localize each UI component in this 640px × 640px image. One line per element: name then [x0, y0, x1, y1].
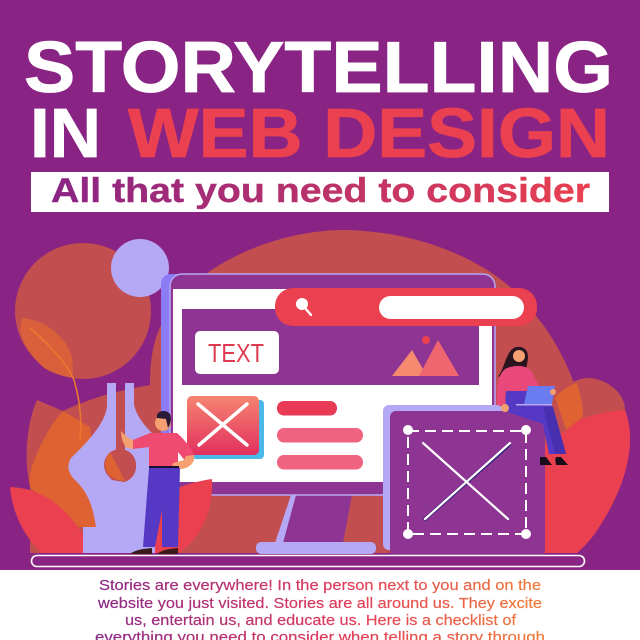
text button: TEXT: [208, 338, 264, 368]
platform: [32, 556, 584, 566]
title: [24, 28, 613, 172]
title: IN: [30, 94, 101, 172]
icon: magnifier: [296, 298, 311, 315]
legs: [505, 391, 566, 454]
search bar: [275, 288, 537, 326]
title: STORYTELLING: [24, 28, 613, 108]
icon: mountains: [392, 336, 459, 376]
monitor: [161, 274, 495, 554]
intro panel: website you just visited. Stories are all around us. They excite: [97, 595, 542, 612]
heels: [540, 458, 568, 465]
monitor stand: [278, 495, 352, 543]
intro panel: Stories are everywhere! In the person next to you and on the: [99, 577, 541, 594]
trousers: [143, 468, 180, 547]
intro panel: [0, 570, 640, 640]
intro panel: us, entertain us, and educate us. Here is a checklist of: [125, 612, 517, 629]
woman figure: [497, 347, 568, 465]
monitor base: [256, 542, 376, 554]
wireframe card: [383, 405, 545, 556]
man figure: [121, 411, 194, 554]
text button: [195, 331, 279, 374]
illustration background shapes: [15, 230, 585, 553]
image tile with cross: [187, 396, 264, 459]
monitor screen: [173, 289, 492, 482]
hero image placeholder: [182, 309, 479, 385]
hands and head: [121, 431, 134, 449]
shoes: [130, 548, 178, 554]
hair: [498, 347, 528, 377]
torso: [497, 366, 540, 405]
right leaves: [545, 378, 630, 553]
pen nib: [68, 383, 165, 553]
title: WEB DESIGN: [128, 94, 610, 172]
right red behind man: [155, 479, 212, 553]
monitor body: [161, 274, 200, 495]
arm, torso: [133, 433, 194, 467]
laptop: [524, 386, 555, 404]
subtitle banner: All that you need to consider: [51, 172, 590, 210]
left red leaf: [10, 487, 83, 553]
content lines: [277, 401, 363, 470]
